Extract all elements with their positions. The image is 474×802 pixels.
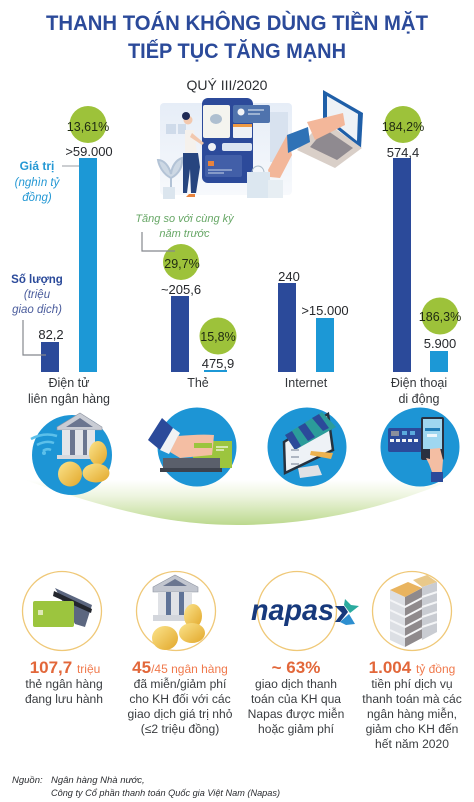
illustration: online payment — [158, 90, 363, 199]
icon: online shop monitor — [268, 408, 346, 486]
stat 2: banks: giao dịch giá trị nhỏ — [128, 707, 233, 721]
chart: electronic interbank: Điện tử — [48, 376, 90, 390]
stat 2: banks: 45/45 ngân hàng — [132, 658, 228, 677]
legend: value: đồng) — [22, 192, 52, 204]
stat 1: bank cards: đang lưu hành — [25, 692, 103, 706]
chart: electronic interbank: liên ngân hàng — [28, 392, 110, 406]
chart: internet: >15.000 — [301, 303, 349, 318]
chart: card: 29,7% — [164, 257, 200, 271]
chart: mobile — [382, 106, 461, 406]
chart: card: Thẻ — [187, 376, 209, 390]
legend: value: (nghìn tỷ — [15, 177, 61, 189]
chart: card: 15,8% — [200, 330, 236, 344]
source — [12, 775, 280, 799]
title — [46, 11, 428, 63]
legend: quantity: (triệu — [24, 289, 51, 301]
stat 3: Napas: ~ 63% — [272, 658, 320, 677]
note: compared with same period: năm trước — [159, 228, 210, 240]
stat 1: bank cards: thẻ ngân hàng — [25, 677, 103, 691]
chart: internet — [278, 269, 349, 390]
stat 4: stacks of money: tiền phí dịch vụ — [371, 677, 453, 691]
chart: internet: 240 — [278, 269, 300, 284]
chart: mobile: Điện thoại — [391, 376, 447, 390]
chart: card: 475,9 — [202, 356, 234, 371]
legend: quantity — [11, 274, 63, 355]
stat 4: stacks of money: ngân hàng miễn, — [367, 706, 457, 721]
subtitle: period: QUÝ III/2020 — [187, 77, 268, 93]
note: compared with same period: Tăng so với cùng kỳ — [135, 213, 235, 225]
chart: mobile: 5.900 — [424, 336, 456, 351]
chart: card — [161, 244, 236, 390]
chart: card: ~205,6 — [161, 282, 201, 297]
stat 4: stacks of money: giảm cho KH đến — [366, 722, 458, 736]
chart: mobile: 574,4 — [387, 145, 419, 160]
chart: electronic interbank: 13,61% — [67, 120, 109, 134]
legend: quantity: giao dịch) — [12, 304, 62, 316]
source: Nguồn: — [12, 775, 43, 786]
icon: bank with coins — [31, 413, 112, 495]
title: TIẾP TỤC TĂNG MẠNH — [128, 40, 346, 63]
source: Công ty Cổ phần thanh toán Quốc gia Việt Nam (Napas) — [51, 788, 280, 799]
chart: mobile: 184,2% — [382, 120, 424, 134]
green lens shape — [25, 480, 452, 525]
title: THANH TOÁN KHÔNG DÙNG TIỀN MẶT — [46, 11, 428, 35]
chart: internet: Internet — [285, 376, 328, 390]
stat 2: banks: cho KH đối với các — [129, 692, 231, 706]
chart: electronic interbank: 82,2 — [38, 327, 64, 342]
stat 4: stacks of money: hết năm 2020 — [375, 737, 449, 751]
stat 4: stacks of money — [362, 572, 462, 751]
chart: electronic interbank: >59.000 — [65, 144, 113, 159]
stat 1: bank cards — [22, 572, 103, 706]
icon: hand with card — [148, 408, 236, 486]
stat 2: banks — [128, 572, 233, 736]
icon: phone payment — [380, 408, 460, 486]
note: compared with same period — [135, 213, 235, 251]
stat 3: Napas: toán của KH qua — [251, 692, 341, 706]
legend: quantity: Số lượng — [11, 274, 63, 286]
chart: electronic interbank — [28, 106, 113, 406]
legend: value — [15, 159, 79, 204]
stat 3: Napas — [248, 572, 359, 736]
stat 2: banks: đã miễn/giảm phí — [134, 676, 227, 691]
stat 3: Napas: napas — [251, 594, 334, 627]
stat 4: stacks of money: thanh toán mà các — [362, 692, 462, 706]
stat 1: bank cards: 107,7 triệu — [30, 658, 100, 677]
source: Ngân hàng Nhà nước, — [51, 775, 145, 786]
stat 3: Napas: Napas được miễn — [248, 706, 344, 721]
chart: mobile: 186,3% — [419, 310, 461, 324]
stat 2: banks: (≤2 triệu đồng) — [141, 722, 219, 736]
stat 3: Napas: hoặc giảm phí — [258, 722, 335, 736]
stat 3: Napas: giao dịch thanh — [255, 677, 337, 691]
legend: value: Giá trị — [20, 159, 54, 173]
stat 4: stacks of money: 1.004 tỷ đồng — [369, 658, 455, 677]
chart: mobile: di động — [398, 392, 440, 406]
